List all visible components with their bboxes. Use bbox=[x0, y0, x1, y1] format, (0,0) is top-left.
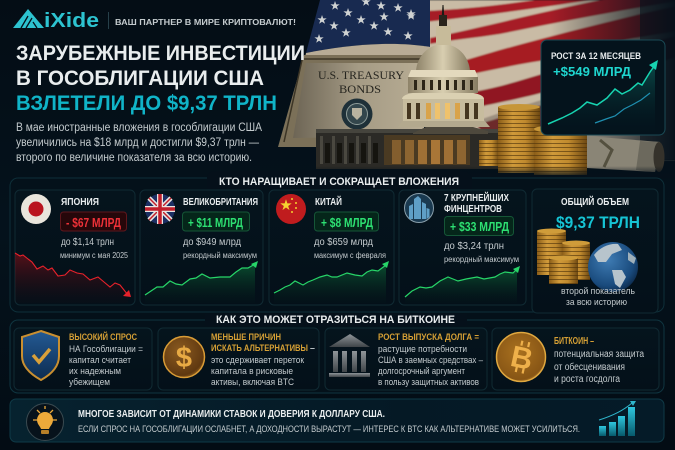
logo: iXide: ВАШ ПАРТНЕР В МИРЕ КРИПТОВАЛЮТ! bbox=[115, 17, 296, 27]
card: China: до $659 млрд bbox=[314, 237, 373, 248]
card: China: КИТАЙ bbox=[315, 195, 342, 208]
icon: bank building bbox=[329, 334, 370, 377]
card: United Kingdom: ВЕЛИКОБРИТАНИЯ bbox=[183, 197, 258, 208]
chart: UK growth bbox=[145, 261, 258, 303]
icon: bitcoin coin bbox=[496, 332, 546, 382]
card: 7 largest financial centres: 7 КРУПНЕЙШИХ bbox=[444, 191, 509, 204]
card: China: максимум с февраля bbox=[314, 251, 386, 260]
card: high demand bbox=[14, 328, 152, 390]
card: debt issuance growth: растущие потребности bbox=[378, 344, 467, 354]
card: Japan: ЯПОНИЯ bbox=[61, 197, 99, 208]
card: total volume: за всю историю bbox=[566, 297, 627, 308]
card: debt issuance growth: США в заемных средствах – bbox=[378, 355, 484, 365]
chart: financial centres growth bbox=[405, 266, 520, 303]
card: bitcoin: и роста госдолга bbox=[554, 374, 620, 385]
icon: light bulb bbox=[26, 404, 64, 440]
card: high demand: НА Гособлигации = bbox=[69, 344, 143, 354]
panel: bottom conclusion: МНОГОЕ ЗАВИСИТ ОТ ДИНАМИКИ СТАВОК И ДОВЕРИЯ К ДОЛЛАРУ США. bbox=[78, 409, 385, 420]
card: 7 largest financial centres: + $33 МЛРД bbox=[450, 220, 509, 234]
card: fewer reasons for alternatives: это сдерживает переток bbox=[211, 355, 305, 365]
card: United Kingdom: рекордный максимум bbox=[183, 251, 257, 260]
title: ВЗЛЕТЕЛИ ДО $9,37 ТРЛН bbox=[16, 92, 277, 115]
chart: growth line bbox=[548, 60, 658, 132]
card: fewer reasons for alternatives: активы, включая BTC bbox=[211, 377, 294, 387]
card: fewer reasons for alternatives bbox=[158, 328, 319, 390]
section: who increases and reduces holdings bbox=[10, 171, 664, 313]
icon: treasury bond certificate: U.S. TREASURY bbox=[318, 68, 404, 82]
card: total volume bbox=[532, 189, 658, 313]
icon: american flag bbox=[304, 0, 675, 178]
card: debt issuance growth: долгосрочный аргумент bbox=[378, 366, 466, 376]
icon: shield bbox=[22, 331, 59, 380]
intro text block: увеличились на $18 млрд и достигли $9,37 трлн — bbox=[16, 137, 259, 149]
card: United Kingdom bbox=[140, 190, 263, 305]
icon: capitol building bbox=[316, 5, 500, 169]
chart: China growth bbox=[274, 261, 389, 303]
icon: dollar coin: $ bbox=[176, 342, 192, 374]
panel: 12-month growth: +$549 МЛРД bbox=[553, 64, 632, 79]
intro text block: В мае иностранные вложения в гособлигации США bbox=[16, 122, 262, 134]
card: China bbox=[269, 190, 394, 305]
card: bitcoin bbox=[492, 328, 659, 390]
title: В ГОСОБЛИГАЦИИ США bbox=[16, 67, 264, 90]
logo: iXide bbox=[13, 9, 296, 32]
card: 7 largest financial centres: рекордный максимум bbox=[444, 255, 519, 264]
icon: globe bbox=[588, 242, 638, 292]
intro text block bbox=[16, 122, 262, 164]
card: fewer reasons for alternatives: ИСКАТЬ АЛЬТЕРНАТИВЫ bbox=[211, 343, 308, 353]
card: high demand: капитал считает bbox=[69, 355, 132, 365]
panel: 12-month growth bbox=[541, 40, 665, 135]
card: China: + $8 МЛРД bbox=[321, 216, 373, 230]
icon: rising bars bbox=[599, 401, 636, 436]
card: Japan bbox=[15, 190, 135, 305]
title: ЗАРУБЕЖНЫЕ ИНВЕСТИЦИИ bbox=[16, 42, 305, 65]
logo: iXide: iXide bbox=[44, 10, 99, 32]
card: Japan: минимум с мая 2025 bbox=[60, 251, 128, 260]
panel: bottom conclusion bbox=[10, 399, 664, 442]
card: fewer reasons for alternatives: – bbox=[310, 343, 315, 353]
icon: China flag: ★ bbox=[280, 198, 292, 212]
card: high demand: их надежным bbox=[69, 366, 121, 376]
card: United Kingdom: + $11 МЛРД bbox=[188, 216, 243, 230]
title bbox=[16, 42, 305, 115]
icon: logo mark bbox=[13, 9, 44, 28]
card: Japan: - $67 МЛРД bbox=[66, 216, 121, 230]
card: debt issuance growth bbox=[325, 328, 487, 390]
card: 7 largest financial centres bbox=[399, 190, 526, 305]
card: fewer reasons for alternatives: капитала в рисковые bbox=[211, 366, 293, 376]
card: bitcoin: потенциальная защита bbox=[554, 349, 644, 360]
icon: treasury bond certificate: BONDS bbox=[339, 82, 381, 96]
icon: rolled banknote bbox=[587, 136, 664, 172]
card: high demand: ВЫСОКИЙ СПРОС bbox=[69, 331, 137, 342]
card: bitcoin: БИТКОИН – bbox=[554, 336, 594, 347]
hero illustration: flag, bond, capitol, coins bbox=[278, 0, 675, 178]
card: United Kingdom: до $949 млрд bbox=[183, 237, 241, 248]
card: bitcoin: от обесценивания bbox=[554, 361, 625, 373]
icon: UK flag bbox=[145, 194, 175, 224]
card: debt issuance growth: в пользу защитных активов bbox=[378, 377, 479, 387]
icon: bitcoin coin: B bbox=[508, 340, 536, 377]
icon: dollar coin bbox=[164, 336, 204, 378]
card: total volume: ОБЩИЙ ОБЪЕМ bbox=[561, 195, 629, 208]
card: 7 largest financial centres: до $3,24 трлн bbox=[444, 241, 504, 252]
card: Japan: до $1,14 трлн bbox=[61, 237, 114, 248]
heading: КАК ЭТО МОЖЕТ ОТРАЗИТЬСЯ НА БИТКОИНЕ bbox=[216, 314, 455, 326]
card: debt issuance growth: РОСТ ВЫПУСКА ДОЛГА = bbox=[378, 332, 479, 342]
heading: КТО НАРАЩИВАЕТ И СОКРАЩАЕТ ВЛОЖЕНИЯ bbox=[219, 176, 459, 188]
card: high demand: убежищем bbox=[69, 377, 110, 387]
section: effect on bitcoin bbox=[10, 314, 664, 393]
icon: coins bbox=[537, 228, 590, 284]
icon: treasury bond certificate bbox=[278, 55, 424, 147]
card: 7 largest financial centres: ФИНЦЕНТРОВ bbox=[444, 204, 502, 215]
chart: Japan decline bbox=[15, 253, 131, 303]
icon: skyscrapers bbox=[404, 194, 434, 222]
icon: coin stacks bbox=[479, 104, 587, 175]
card: total volume: $9,37 ТРЛН bbox=[556, 214, 640, 232]
card: fewer reasons for alternatives: МЕНЬШЕ ПРИЧИН bbox=[211, 332, 281, 342]
intro text block: второго по величине показателя за всю историю. bbox=[16, 152, 252, 164]
card: total volume: второй показатель bbox=[561, 286, 635, 297]
panel: 12-month growth: РОСТ ЗА 12 МЕСЯЦЕВ bbox=[551, 51, 641, 61]
